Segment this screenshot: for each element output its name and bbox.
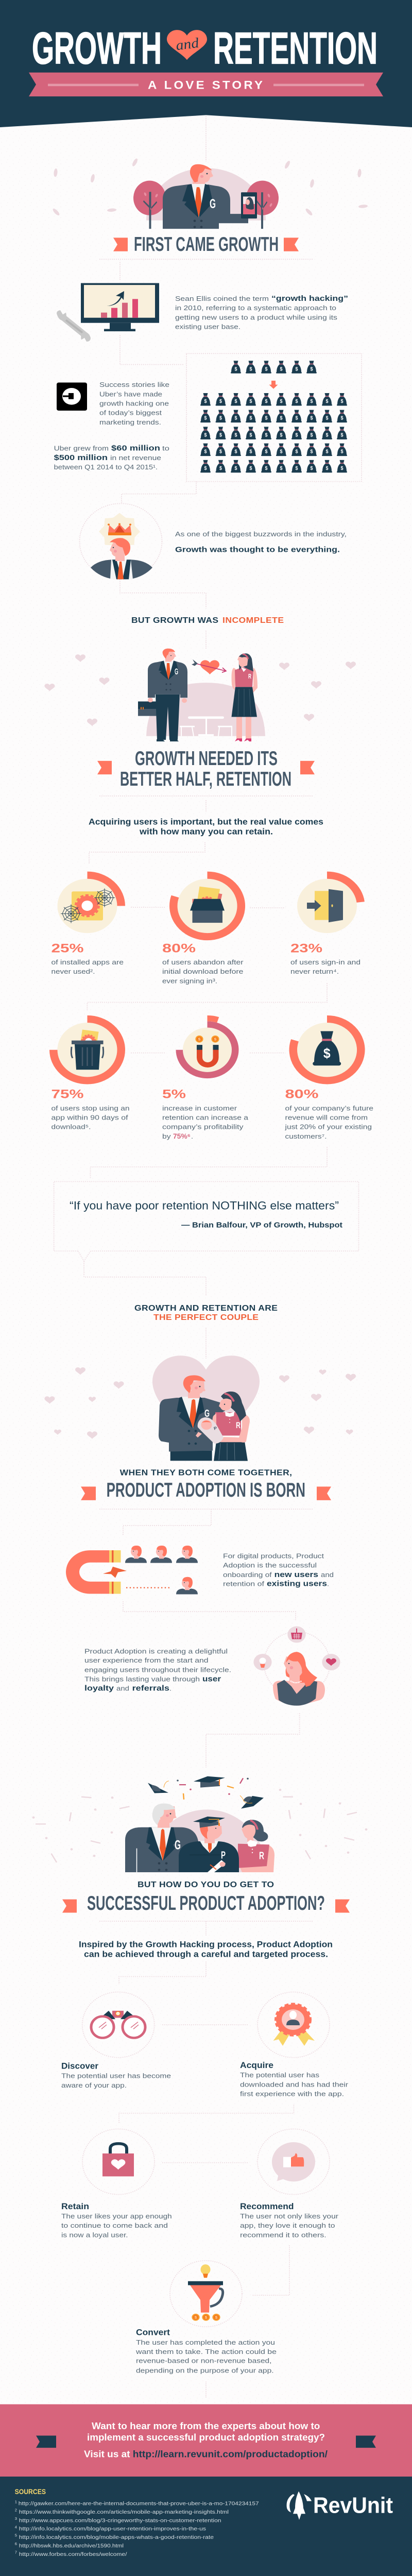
heading: product adoption is born: WHEN THEY BOTH COME TOGETHER,: [120, 1468, 292, 1477]
sources list: 3: [15, 2516, 17, 2521]
phone: [241, 192, 257, 218]
text: inspired by growth hacking: [79, 1940, 333, 1959]
woman: R: [236, 1420, 241, 1430]
icon: binoculars: [82, 1992, 154, 2058]
text: uber revenue: Uber grew from: [54, 444, 109, 452]
text: product adoption definition: onboarding of: [223, 1570, 272, 1579]
sources list: http://gawker.com/here-are-the-internal-documents-that-prove-uber-is-a-mo-1704234157: [19, 2501, 259, 2506]
label: The potential user has become: [61, 2072, 171, 2079]
value and label: of users sign-in and: [290, 958, 360, 966]
illustration: crowned growth character: [79, 503, 162, 579]
label: The user has completed the action you: [136, 2338, 275, 2346]
sources list: 2: [15, 2508, 17, 2513]
heading: product adoption is born: [81, 1468, 331, 1501]
heading: perfect couple: THE PERFECT COUPLE: [153, 1313, 259, 1322]
value and label: company’s profitability: [162, 1123, 244, 1130]
illustration: floating hearts: [44, 654, 356, 726]
value and label: initial download before: [162, 968, 244, 975]
label: app, they love it enough to: [240, 2222, 335, 2229]
icon: padlock with heart: [82, 2129, 154, 2194]
heading: growth needed its better half: BETTER HALF, RETENTION: [120, 768, 291, 790]
father: [125, 1803, 198, 1872]
icon: basket: [287, 1626, 306, 1643]
label: recommend it to others.: [240, 2231, 327, 2239]
label: The potential user has: [240, 2071, 319, 2079]
donut 23%: [297, 875, 360, 933]
text: delightful experience: loyalty: [84, 1684, 114, 1692]
text: uber success: Uber’s have made: [99, 390, 162, 398]
donut 80%: [293, 1019, 361, 1080]
woman: R: [248, 673, 251, 680]
step: discover: [61, 1992, 171, 2089]
label: Convert: [136, 2327, 170, 2337]
text: delightful experience: user: [202, 1675, 221, 1683]
footer: [0, 2477, 412, 2576]
text: buzzword: Growth was thought to be everything.: [175, 546, 340, 554]
icon: lightbulb: [253, 1654, 272, 1670]
step: convert: [135, 2261, 277, 2374]
text: delightful experience: engaging users throughout their lifecycle.: [84, 1666, 231, 1674]
label: [61, 2201, 172, 2239]
label: is now a loyal user.: [61, 2231, 128, 2239]
value and label: 75%: [52, 1088, 84, 1101]
illustration: graduation family: [125, 1803, 274, 1872]
value and label: revenue will come from: [285, 1113, 368, 1121]
text: product adoption definition: For digital products, Product: [223, 1552, 324, 1560]
value and label: [290, 942, 360, 975]
icon: award badge: [258, 1992, 330, 2058]
text: delightful experience: .: [169, 1684, 171, 1692]
arrow down: [269, 381, 278, 389]
callout: quote: [54, 1181, 358, 1295]
value and label: by: [162, 1132, 171, 1140]
baby: [196, 1417, 224, 1444]
subtitle ribbon: [29, 73, 383, 96]
text: uber revenue: between Q1 2014 to Q4 2015¹.: [54, 463, 158, 471]
man: [148, 649, 187, 741]
text: growth hacking definition: “growth hacking”: [271, 295, 348, 303]
heading: perfect couple: [134, 1303, 278, 1322]
graduate: [179, 1817, 239, 1872]
text: delightful experience: This brings lasting value through: [84, 1675, 200, 1683]
sources list: http://info.localytics.com/blog/mobile-apps-whats-a-good-retention-rate: [19, 2535, 214, 2540]
heading: first came growth: FIRST CAME GROWTH: [134, 233, 279, 255]
text: inspired by growth hacking: Inspired by the Growth Hacking process, Product Adoption: [79, 1940, 333, 1950]
text: delightful experience: Product Adoption is creating a delightful: [84, 1647, 228, 1655]
heart and arrow: [192, 659, 226, 674]
label: downloaded and has had their: [240, 2080, 348, 2088]
character body: [163, 178, 248, 229]
illustration: flying graduation caps: [148, 1776, 264, 1808]
text: product adoption definition: .: [327, 1580, 329, 1588]
top row: 6 money bags: [231, 361, 317, 374]
cafe table and chairs: [180, 717, 232, 736]
icon: open box with app: [190, 887, 225, 923]
value and label: never return⁴.: [290, 968, 339, 975]
text: delightful experience: and: [116, 1684, 129, 1692]
crown: [108, 523, 131, 535]
label: to continue to come back and: [61, 2222, 168, 2229]
donut 25%: [58, 875, 121, 933]
sources list: 5: [15, 2533, 17, 2538]
sources list: http://www.appcues.com/blog/3-cringeworthy-stats-on-customer-retention: [19, 2518, 221, 2523]
mother: [238, 1820, 274, 1872]
woman: [232, 653, 258, 741]
callout: quote: “If you have poor retention NOTHING else matters”: [70, 1199, 339, 1212]
magnet: [66, 1550, 121, 1594]
stat: 5% retention increase: [162, 1019, 248, 1141]
tree left: [133, 181, 166, 229]
value and label: download⁵.: [52, 1123, 91, 1130]
users: [125, 1546, 198, 1594]
illustration: floating hearts: [44, 1367, 356, 1439]
stat: 23% sign in and never return: [290, 875, 360, 975]
donut 5%: [179, 1019, 235, 1075]
panel: call to action: http://learn.revunit.com/productadoption/: [133, 2449, 328, 2460]
icon: app with cobwebs: [61, 888, 115, 923]
sources list: SOURCES: [15, 2488, 46, 2496]
lightning bolt: [103, 1567, 127, 1578]
stat: 80% future revenue: [284, 1019, 373, 1140]
illustration: magnet attracting users: [66, 1546, 198, 1594]
text: delightful experience: user experience from the start and: [84, 1656, 209, 1664]
sources list: 7: [15, 2550, 17, 2554]
value and label: customers⁷.: [285, 1132, 327, 1140]
label: [135, 2327, 277, 2374]
label: The user not only likes your: [240, 2212, 338, 2220]
callout: quote: — Brian Balfour, VP of Growth, Hubspot: [181, 1221, 343, 1229]
icon: wrench: [57, 310, 91, 342]
heading: successful product adoption: BUT HOW DO YOU DO GET TO: [138, 1880, 274, 1889]
text: delightful experience: [84, 1647, 231, 1692]
sources list: http://hbswk.hbs.edu/archive/1590.html: [19, 2543, 124, 2549]
text: growth hacking definition: getting new users to a product while using its: [175, 313, 337, 321]
panel: call to action: Visit us at: [84, 2449, 130, 2460]
label: [240, 2060, 348, 2097]
woman: [273, 1652, 325, 1706]
value and label: of your company’s future: [285, 1104, 373, 1112]
step: retain: [61, 2129, 172, 2239]
label: depending on the purpose of your app.: [136, 2366, 274, 2374]
text: inspired by growth hacking: can be achieved through a careful and targeted process.: [84, 1950, 328, 1959]
value and label: [284, 1088, 373, 1140]
text: growth hacking definition: Sean Ellis coined the term: [175, 295, 269, 302]
icon: heart: [322, 1654, 340, 1670]
illustration: growth meets retention: [138, 649, 265, 741]
label: Retain: [61, 2201, 89, 2211]
woman: [211, 1392, 250, 1461]
text: acquiring users: [89, 817, 323, 836]
label: aware of your app.: [61, 2081, 127, 2089]
step: acquire: [240, 1992, 348, 2097]
icon: funnel with bulb and coins: [170, 2261, 242, 2327]
man: [159, 1375, 225, 1461]
father: G: [175, 1838, 181, 1852]
value and label: retention can increase a: [162, 1113, 248, 1121]
value and label: of users abandon after: [162, 958, 244, 966]
illustration: growth character with phone: [133, 164, 279, 229]
text: uber success: growth hacking one: [99, 399, 169, 407]
text: product adoption definition: Adoption is the successful: [223, 1561, 317, 1569]
text: uber revenue: [54, 444, 169, 471]
stat: 75% stop using within 90 days: [52, 1019, 130, 1130]
man: G: [175, 667, 178, 676]
illustration: family with baby: [152, 1355, 260, 1461]
revunit logo: RevUnit: [313, 2492, 393, 2518]
text: uber success: Success stories like: [99, 381, 169, 388]
text: acquiring users: Acquiring users is important, but the real value comes: [89, 817, 323, 826]
value and label: 75%⁶: [173, 1132, 191, 1141]
panel: call to action: implement a successful product adoption strategy?: [87, 2433, 325, 2443]
value and label: never used².: [52, 968, 95, 975]
label: first experience with the app.: [240, 2090, 344, 2097]
value and label: [52, 942, 124, 975]
panel: call to action: [0, 2404, 412, 2477]
stat: 80% abandon after download: [162, 875, 244, 985]
icon: trash can: [71, 1030, 104, 1070]
sources list: 6: [15, 2541, 17, 2546]
text: product adoption definition: [223, 1552, 334, 1588]
sources list: http://info.localytics.com/blog/app-user-retention-improves-in-the-us: [19, 2526, 207, 2532]
label: Discover: [61, 2061, 98, 2071]
text: product adoption definition: and: [321, 1570, 334, 1579]
donut 75%: [54, 1019, 121, 1080]
value and label: of users stop using an: [52, 1104, 129, 1112]
text: product adoption definition: retention of: [223, 1580, 264, 1588]
title: growth: GROWTH: [32, 24, 162, 74]
sources list: 1: [15, 2500, 17, 2504]
heading: first came growth: [113, 233, 299, 255]
text: uber revenue: $60 million: [111, 444, 160, 452]
panel: call to action: Want to hear more from the experts about how to: [92, 2421, 320, 2432]
value and label: app within 90 days of: [52, 1113, 128, 1121]
donut 80%: [174, 875, 241, 937]
value and label: 80%: [285, 1088, 319, 1101]
icon: speech bubble thumbs up: [258, 2129, 330, 2194]
mother: R: [259, 1850, 264, 1861]
text: growth hacking definition: [175, 295, 348, 330]
character shoulders and tie: [91, 560, 152, 579]
icon: money bag: [313, 1031, 341, 1065]
text: growth hacking definition: existing user base.: [175, 323, 241, 330]
step: recommend: [240, 2129, 338, 2239]
text: delightful experience: referrals: [132, 1684, 169, 1692]
value and label: 25%: [52, 942, 84, 955]
bottom rows: 50 money bags: [200, 393, 347, 472]
icon: computer monitor with chart: [81, 283, 159, 331]
panel: money bags chart: [186, 353, 362, 482]
label: want them to take. The action could be: [135, 2348, 277, 2355]
value and label: [52, 1088, 130, 1130]
text: product adoption definition: new users: [274, 1570, 318, 1579]
value and label: just 20% of your existing: [284, 1123, 372, 1130]
text: uber success: of today’s biggest: [99, 409, 162, 416]
value and label: increase in customer: [162, 1104, 237, 1112]
heading: perfect couple: GROWTH AND RETENTION ARE: [134, 1303, 278, 1313]
text: uber revenue: in net revenue: [110, 453, 161, 462]
value and label: 80%: [162, 942, 196, 955]
value and label: ever signing in³.: [162, 977, 217, 985]
value and label: of installed apps are: [52, 958, 124, 966]
heading: growth needed its better half: GROWTH NEEDED ITS: [135, 747, 278, 770]
text: product adoption definition: existing users: [267, 1580, 327, 1588]
heading: successful product adoption: [62, 1880, 350, 1914]
icon: magnet with coins: [195, 1036, 219, 1067]
label: The user likes your app enough: [61, 2212, 172, 2220]
icon: door with arrow: [307, 889, 343, 922]
heading: growth needed its better half: [97, 747, 315, 790]
icon: uber logo: [57, 383, 87, 411]
icon: heart with and: [167, 30, 207, 60]
value and label: 23%: [290, 942, 322, 955]
text: uber revenue: $500 million: [54, 453, 108, 462]
text: uber revenue: to: [162, 444, 169, 452]
heading: but growth was incomplete: INCOMPLETE: [222, 616, 284, 625]
revunit logo: [286, 2492, 393, 2520]
graduate: P: [221, 1850, 226, 1861]
illustration: confetti: [32, 1789, 367, 1862]
value and label: [162, 1088, 248, 1141]
label: revenue-based or non-revenue based,: [136, 2357, 272, 2365]
value and label: .: [191, 1132, 193, 1140]
man: G: [204, 1408, 210, 1419]
character head: [190, 164, 213, 183]
text: uber success: [99, 381, 169, 426]
label: Recommend: [240, 2201, 294, 2211]
sources list: [15, 2488, 259, 2557]
text: buzzword: As one of the biggest buzzwords in the industry,: [175, 530, 347, 538]
text: acquiring users: with how many you can retain.: [139, 826, 273, 836]
subtitle ribbon: A LOVE STORY: [148, 79, 263, 91]
illustration: leaves: [52, 158, 368, 216]
character head: [110, 538, 130, 561]
text: uber success: marketing trends.: [99, 418, 161, 426]
value and label: [162, 942, 244, 985]
sources list: https://www.thinkwithgoogle.com/articles/mobile-app-marketing-insights.html: [19, 2509, 229, 2515]
sources list: http://www.forbes.com/forbes/welcome/: [19, 2551, 128, 2557]
text: growth hacking definition: in 2010, referring to a systematic approach to: [175, 304, 336, 312]
icon: heart with and: and: [175, 35, 200, 54]
label: Acquire: [240, 2060, 273, 2070]
label: [61, 2061, 171, 2089]
briefcase: [138, 699, 162, 716]
baby: P: [213, 1426, 218, 1431]
heading: but growth was incomplete: BUT GROWTH WAS: [131, 616, 218, 625]
stat: 25% of apps never used: [52, 875, 124, 975]
tree right: [246, 181, 279, 229]
label: [240, 2201, 338, 2239]
text: buzzword: [175, 530, 347, 554]
value and label: 5%: [162, 1088, 186, 1101]
character body: G: [210, 197, 216, 211]
heading: but growth was incomplete: [131, 616, 284, 625]
header banner: [0, 0, 412, 127]
sources list: 4: [15, 2525, 18, 2529]
illustration: happy user with icons: [253, 1626, 340, 1706]
